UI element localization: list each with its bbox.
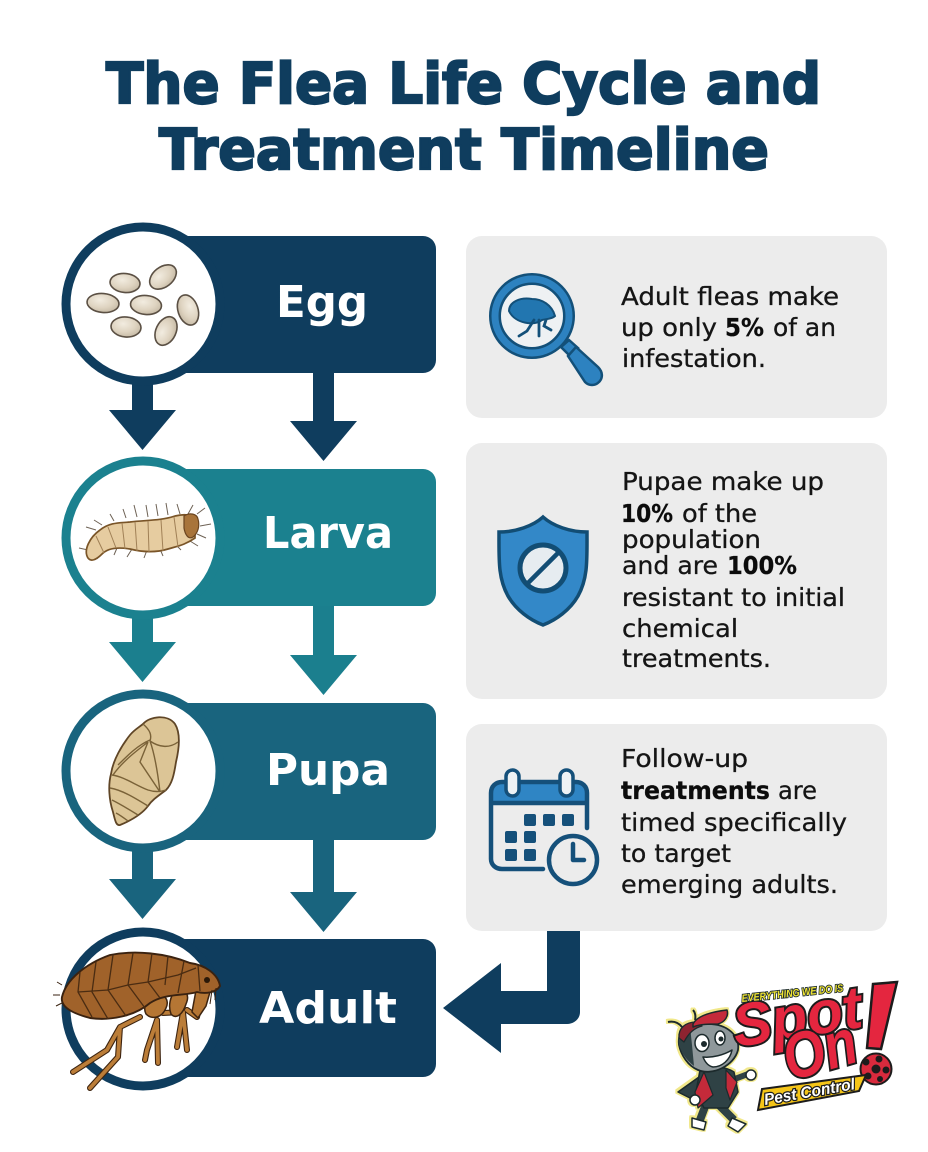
- logo exclamation mark: [867, 982, 897, 1049]
- panel: adult fleas fact: [466, 236, 887, 418]
- logo mascot: [668, 1010, 756, 1132]
- title: Treatment Timeline: [159, 118, 769, 183]
- text: follow-up fact: to target: [621, 839, 731, 868]
- logo: Spot On Pest Control: [668, 973, 897, 1132]
- text: pupae fact: population: [622, 525, 761, 554]
- label: larva: Larva: [263, 508, 393, 559]
- text: pupae fact: treatments.: [622, 644, 771, 673]
- text: follow-up fact: are: [778, 776, 817, 805]
- text: follow-up fact: treatments: [621, 776, 770, 805]
- arrows: pupa to adult: [109, 838, 357, 932]
- label: adult: Adult: [259, 983, 397, 1034]
- icon: larva: [79, 503, 211, 560]
- panel: pupae fact: [466, 443, 887, 699]
- logo word: On: On: [774, 1005, 865, 1094]
- stage: larva: [66, 461, 436, 615]
- title: [106, 52, 821, 183]
- logo tagline: EVERYTHING WE DO IS: [741, 982, 844, 1005]
- stage: egg: [66, 227, 436, 381]
- text: pupae fact: Pupae make up: [622, 467, 824, 496]
- title: The Flea Life Cycle and: [106, 52, 821, 117]
- icon: magnifying glass: [495, 279, 602, 385]
- logo ladybug ball: [860, 1054, 892, 1084]
- text: follow-up fact: timed specifically: [621, 808, 847, 837]
- stage: pupa: [66, 694, 436, 848]
- label: egg: Egg: [276, 277, 368, 328]
- text: follow-up fact: Follow-up: [621, 744, 748, 773]
- text: pupae fact: resistant to initial: [622, 583, 845, 612]
- text: pupae fact: [621, 467, 845, 673]
- text: adult fleas fact: [621, 282, 839, 373]
- stage: adult: [53, 932, 436, 1088]
- text: pupae fact: 10%: [621, 499, 673, 528]
- icon: adult flea: [53, 953, 220, 1088]
- panel: follow-up fact: [466, 724, 887, 931]
- text: adult fleas fact: of an: [773, 313, 836, 342]
- text: adult fleas fact: infestation.: [622, 344, 766, 373]
- text: follow-up fact: [621, 744, 847, 899]
- text: follow-up fact: emerging adults.: [621, 870, 838, 899]
- logo banner: Pest Control: [763, 1076, 857, 1109]
- text: pupae fact: 100%: [727, 551, 797, 580]
- text: pupae fact: chemical: [622, 614, 738, 643]
- icon: shield: [499, 517, 587, 625]
- arrow: follow-up to adult: [443, 931, 580, 1053]
- arrows: egg to larva: [109, 370, 357, 461]
- text: adult fleas fact: up only: [621, 313, 717, 342]
- icon: pupa: [109, 717, 179, 825]
- text: adult fleas fact: Adult fleas make: [621, 282, 839, 311]
- icon: calendar with clock: [491, 770, 597, 884]
- text: pupae fact: and are: [622, 551, 718, 580]
- logo word: Spot: Spot: [728, 973, 869, 1060]
- text: pupae fact: of the: [682, 499, 757, 528]
- icon: eggs: [86, 260, 202, 349]
- label: pupa: Pupa: [266, 745, 390, 796]
- arrows: larva to pupa: [109, 604, 357, 695]
- text: adult fleas fact: 5%: [725, 313, 764, 342]
